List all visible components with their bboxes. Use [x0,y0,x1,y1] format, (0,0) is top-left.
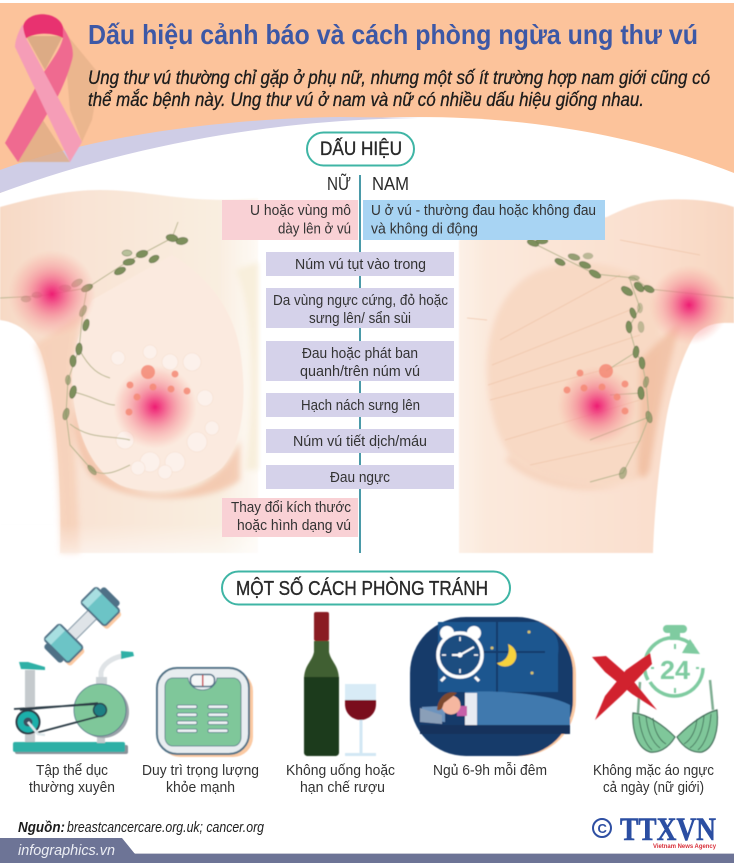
sign: skin changes: Da vùng ngực cứng, đỏ hoặc [273,293,448,309]
glow: armpit [649,265,729,345]
tumour dots [564,364,628,414]
sign: skin changes [266,288,454,328]
column label: female: NỮ [327,173,351,194]
illustration: female breast [0,190,258,553]
sign: female lump: U hoặc vùng mô [250,203,351,219]
sign: discharge [266,429,454,453]
captions: Duy trì trọng lượng [142,763,259,779]
sign: discharge: Núm vú tiết dịch/máu [293,434,427,450]
lymph nodes [21,234,189,476]
milk glands [111,345,219,479]
sign: inverted nipple: Núm vú tụt vào trong [295,257,426,273]
heading: prevention [222,572,510,604]
sign: female lump: dày lên ở vú [278,222,351,238]
source: Nguồn: [18,820,65,836]
icon: weighing scale [157,668,253,757]
source: breastcancercare.org.uk; cancer.org [67,820,264,836]
sign: shape change: Thay đổi kích thước [231,500,351,516]
icon: pink ribbon [5,14,100,162]
captions: Ngủ 6-9h mỗi đêm [433,762,547,779]
logo: TTXVN [593,812,717,850]
illustration: male chest [459,199,734,553]
icon: stopwatch, bra and cross: 24 [660,655,691,685]
column label: male: NAM [372,174,409,194]
sign: chest pain: Đau ngực [330,470,390,486]
captions: Không mặc áo ngực [593,763,714,779]
lymph nodes [526,238,655,480]
captions: Tập thể dục [36,763,108,779]
captions: Không uống hoặc [286,763,395,779]
center divider line [359,175,361,553]
icon: wine bottle and glass [304,612,376,756]
intro text [88,68,710,111]
sign: swollen nodes: Hạch nách sưng lên [301,398,420,414]
tumour dots [126,365,190,416]
clock [438,626,482,681]
sign: pain or rash: Đau hoặc phát ban [302,346,418,362]
captions [29,762,714,796]
footer bar [0,838,734,863]
sign: shape change: hoặc hình dạng vú [237,518,351,534]
sign: pain or rash [266,341,454,381]
footer bar: infographics.vn [18,843,115,859]
logo: TTXVN: C [598,821,608,836]
sign: skin changes: sưng lên/ sẩn sùi [309,311,411,327]
heading: prevention: MỘT SỐ CÁCH PHÒNG TRÁNH [236,576,488,600]
icon: stopwatch, bra and cross [592,625,717,752]
glow: armpit [8,250,96,338]
captions: khỏe mạnh [166,780,235,796]
sign: male lump: U ở vú - thường đau hoặc không đau [371,203,596,219]
sign: male lump [363,200,605,240]
sign: pain or rash: quanh/trên núm vú [300,364,420,380]
heading: signs: DẤU HIỆU [320,138,402,160]
sign: male lump: và không di động [371,222,478,238]
heading: signs [307,132,414,166]
header background [0,3,734,210]
icon: sleep scene [410,617,576,756]
icon: exercise bike [13,651,134,754]
captions: hạn chế rượu [300,780,385,796]
logo: TTXVN: Vietnam News Agency [653,844,717,850]
sign: female lump [222,200,358,240]
icon: dumbbell [40,583,127,670]
moon [497,644,516,666]
sign: inverted nipple [266,252,454,276]
captions: thường xuyên [29,780,115,796]
intro text: thể mắc bệnh này. Ung thư vú ở nam và nữ có nhiều dấu hiệu giống nhau. [88,90,644,111]
sleeper [420,692,570,725]
captions: cả ngày (nữ giới) [603,780,704,796]
glow: nipple [113,365,197,449]
logo: TTXVN: TTXVN [620,812,716,848]
sign: shape change [222,498,358,537]
sign: chest pain [266,465,454,489]
glow: nipple [557,366,637,446]
sign: swollen nodes [266,393,454,417]
